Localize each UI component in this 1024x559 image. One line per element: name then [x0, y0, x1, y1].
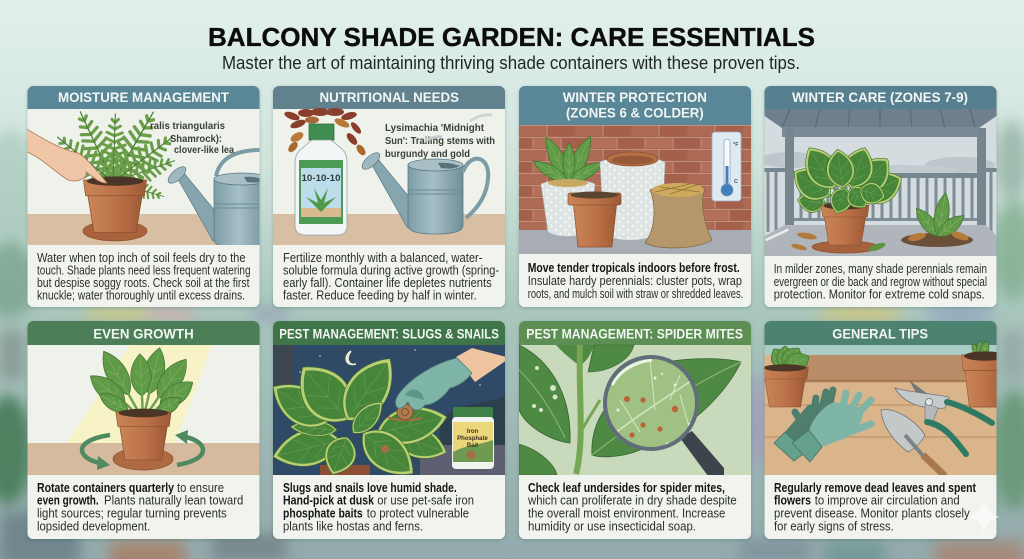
header: even growth	[28, 321, 260, 345]
garbled label text	[385, 115, 495, 160]
header: nutritional needs: NUTRITIONAL NEEDS	[320, 90, 459, 105]
illustration: gloves, trowel and pruners on wooden table	[762, 340, 1008, 476]
body text: early fall). Container life depletes nutrients	[283, 276, 492, 290]
body text: to protect vulnerable	[367, 506, 469, 520]
gloves	[774, 390, 871, 462]
jar: iron phosphate bait: Iron	[467, 429, 478, 435]
jar: iron phosphate bait	[452, 407, 494, 469]
body text: flowers	[774, 494, 811, 508]
header: even growth: EVEN GROWTH	[93, 326, 194, 342]
snail on leaf	[381, 404, 422, 453]
body text	[28, 245, 260, 307]
header: general tips	[764, 321, 996, 345]
body text	[764, 256, 996, 307]
panel: winter care	[760, 86, 997, 307]
body text: Rotate containers quarterly	[37, 481, 174, 495]
body text: the overall moist environment. Increase	[528, 506, 725, 520]
header: winter care: WINTER CARE (ZONES 7-9)	[792, 90, 968, 105]
illustration: covered balcony with hosta and regrowing plant	[760, 109, 997, 257]
body text: Move tender tropicals indoors before frost.	[528, 261, 740, 275]
body text: to improve air circulation and	[815, 494, 960, 508]
header: spider mites: PEST MANAGEMENT: SPIDER MITES	[526, 326, 743, 342]
trowel	[881, 410, 945, 476]
body text: or use pet-safe iron	[377, 494, 474, 508]
body text	[519, 475, 751, 539]
header: winter protection: (ZONES 6 & COLDER)	[566, 106, 704, 120]
header: slugs and snails	[273, 321, 505, 345]
header: winter protection: WINTER PROTECTION	[563, 90, 707, 105]
body text: light sources; regular turning prevents	[37, 506, 227, 520]
body text: Slugs and snails love humid shade.	[283, 481, 457, 495]
body text: touch. Shade plants need less frequent watering	[37, 264, 250, 278]
body text: humidity or use insecticidal soap.	[528, 520, 696, 534]
body text: protection. Monitor for extreme cold snaps.	[774, 288, 985, 302]
body text: to ensure	[177, 481, 224, 495]
illustration: potted plant in light beam with rotation arrows	[28, 345, 260, 475]
illustration: fertilizer bottle, burgundy plant, watering can: 10-10-10	[302, 173, 340, 184]
body text: Plants naturally lean toward	[104, 494, 243, 508]
pruners	[895, 380, 992, 454]
body text: Check leaf undersides for spider mites,	[528, 481, 725, 495]
garbled label text: Sun': Trailing stems with	[385, 135, 495, 147]
title: BALCONY SHADE GARDEN: CARE ESSENTIALS	[208, 22, 815, 52]
panel: slugs and snails	[263, 321, 510, 539]
body text	[764, 475, 996, 539]
body text: prevent disease. Monitor plants closely	[774, 506, 970, 520]
body text: but despise soggy roots. Check soil at the first	[37, 276, 250, 290]
panel: spider mites	[519, 321, 751, 539]
garbled label text: Lysimachia 'Midnight	[385, 122, 484, 134]
body text: phosphate baits	[283, 506, 363, 520]
header: moisture management	[28, 86, 260, 109]
header: winter protection	[519, 86, 751, 125]
panel: even growth	[28, 321, 260, 539]
icon: sparkle watermark	[968, 500, 1000, 534]
illustration: insulated pots against a brick wall with thermometer: C	[734, 179, 738, 185]
body text	[273, 475, 505, 539]
panel: general tips	[762, 321, 1008, 539]
illustration: insulated pots against a brick wall with thermometer: °F	[733, 142, 739, 148]
illustration: hand testing soil of potted fern beside watering can	[28, 111, 260, 245]
illustration: magnifying glass over mite-infested leaf	[519, 345, 751, 476]
body text: Regularly remove dead leaves and spent	[774, 481, 977, 495]
jar: iron phosphate bait: Bait	[467, 443, 478, 449]
panel: winter protection	[519, 86, 751, 307]
body text: knuckle; water thoroughly until excess drains.	[37, 288, 245, 302]
body text: even growth.	[37, 494, 99, 508]
garbled label text	[150, 122, 234, 153]
body text	[273, 252, 505, 307]
body text: lopsided development.	[37, 520, 150, 534]
body text: Hand-pick at dusk	[283, 494, 375, 508]
body text: roots, and mulch soil with straw or shredded leaves.	[528, 287, 743, 301]
body text: faster. Reduce feeding by half in winter.	[283, 288, 477, 302]
panel: moisture management	[27, 86, 269, 307]
panel: nutritional needs	[273, 86, 505, 307]
garbled label text: burgundy and gold	[385, 148, 470, 160]
garbled label text: clover-like lea	[174, 144, 234, 156]
garbled label text: Shamrock):	[170, 133, 222, 145]
garbled label text: ralis triangularis	[150, 120, 225, 132]
header: winter care	[764, 86, 996, 109]
illustration: gloved hand picking snail off hosta at night	[273, 345, 505, 475]
body text: which can proliferate in dry shade despite	[527, 494, 737, 508]
illustration: fertilizer bottle, burgundy plant, watering can	[273, 108, 505, 245]
body text: plants like hostas and ferns.	[283, 520, 423, 534]
header: spider mites	[519, 321, 751, 345]
body text: soluble formula during active growth (spring-	[283, 264, 499, 278]
body text: Water when top inch of soil feels dry to the	[37, 251, 246, 265]
jar: iron phosphate bait: Phosphate	[457, 436, 488, 442]
body text: Fertilize monthly with a balanced, water-	[283, 251, 482, 265]
header: general tips: GENERAL TIPS	[832, 326, 928, 342]
header: nutritional needs	[273, 86, 505, 109]
header: slugs and snails: PEST MANAGEMENT: SLUGS & SNAILS	[279, 326, 499, 342]
header: moisture management: MOISTURE MANAGEMENT	[58, 90, 230, 105]
illustration: insulated pots against a brick wall with thermometer	[519, 125, 751, 254]
subtitle: Master the art of maintaining thriving shade containers with these proven tips.	[222, 53, 800, 73]
body text: for early signs of stress.	[774, 520, 894, 534]
body text	[519, 262, 751, 307]
body text	[28, 482, 260, 539]
body text: Insulate hardy perennials: cluster pots, wrap	[528, 274, 742, 288]
